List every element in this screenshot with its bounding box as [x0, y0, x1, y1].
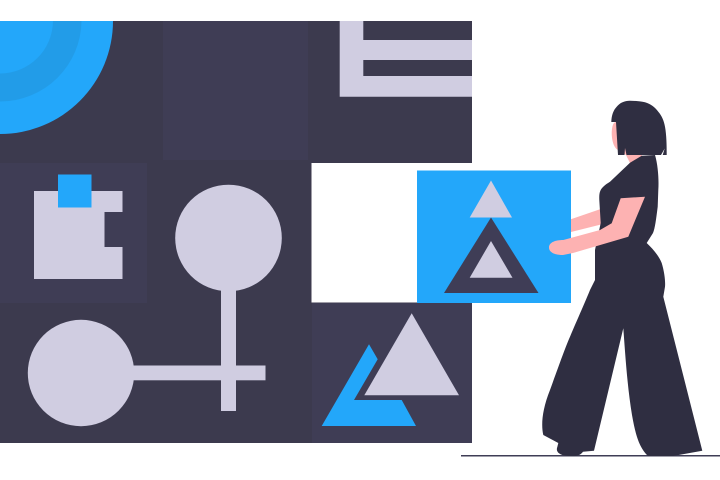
front arm [549, 197, 645, 255]
tile: middle left [0, 163, 147, 303]
icon: blue concentric quarter circles [0, 21, 113, 134]
panel: dark tile board [0, 21, 472, 443]
ground line [461, 455, 720, 456]
hair [611, 101, 667, 155]
top triangle [470, 180, 512, 218]
icon: puzzle piece with blue square [34, 174, 122, 279]
icon: connected circles [28, 185, 282, 426]
panel: white empty tile [312, 163, 472, 302]
blue square [58, 174, 92, 208]
figure: woman [542, 101, 702, 456]
tile: bottom right [312, 303, 472, 443]
tile: top middle [163, 21, 308, 160]
inner triangle [470, 241, 512, 278]
icon: light and blue triangles [322, 313, 459, 426]
face and neck [612, 120, 642, 163]
woman's back arm [565, 209, 602, 234]
light triangle [364, 313, 459, 395]
icon: E-shaped bars [340, 21, 472, 97]
top and trousers [542, 155, 702, 456]
dark triangle [444, 218, 538, 293]
panel: blue card held by the woman [417, 170, 571, 303]
